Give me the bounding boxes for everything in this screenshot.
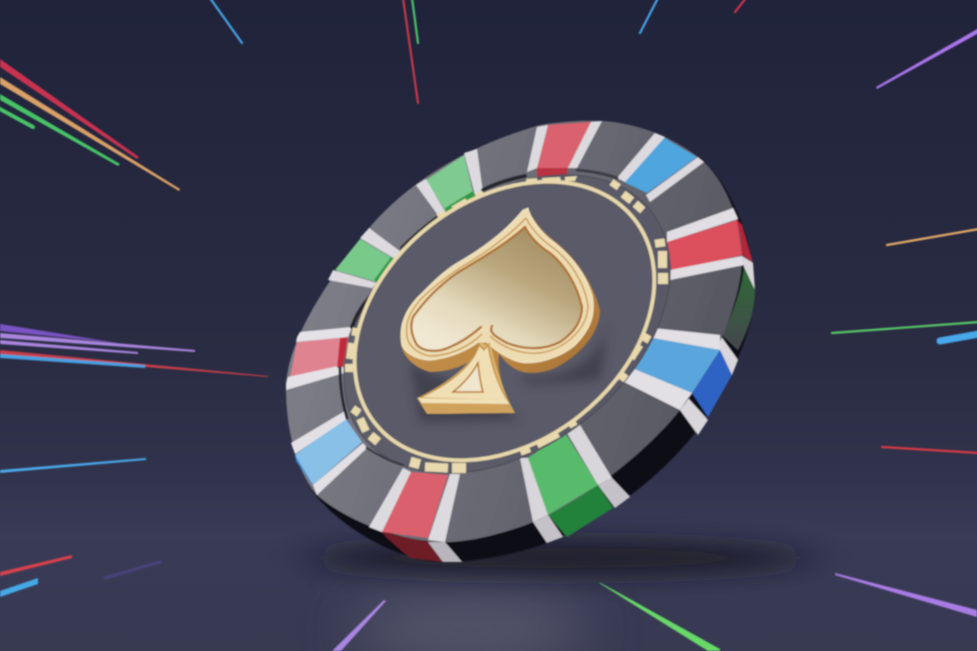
spade outer contour line [407, 218, 588, 356]
gold spade [400, 208, 600, 414]
streaks: middle left [0, 324, 268, 377]
segment: left red [286, 327, 352, 390]
segment: top red [527, 121, 602, 177]
segment: lower left blue [291, 411, 367, 495]
spade face outline [411, 227, 582, 351]
streaks: lower left [0, 458, 160, 597]
segment: bottom red [369, 468, 460, 542]
spade top rim [401, 208, 593, 363]
segment: top left green [416, 149, 483, 218]
streaks: upper left [0, 59, 180, 191]
chip side edge [286, 121, 755, 562]
poker chip [286, 114, 755, 562]
streaks: top [210, 0, 977, 103]
chip top face [286, 121, 742, 542]
spade shadow [410, 315, 610, 422]
spade stem [417, 342, 515, 414]
floor reflection glow [350, 592, 590, 651]
streaks: bottom [332, 583, 720, 651]
segment: top right blue [617, 133, 704, 202]
segment: right red [667, 208, 744, 280]
groove shadows [340, 170, 617, 465]
spade body extrusion [400, 208, 600, 414]
inner disk [286, 114, 728, 534]
segment: bottom green [520, 420, 612, 522]
tick marks [345, 176, 668, 473]
segment: left green [328, 228, 401, 288]
gold ring [300, 124, 709, 518]
segment: right blue [620, 328, 720, 410]
chip shadow on floor [310, 540, 810, 576]
spade face [411, 227, 582, 351]
streaks: right [832, 229, 977, 617]
chip side coloured blocks [382, 220, 755, 562]
